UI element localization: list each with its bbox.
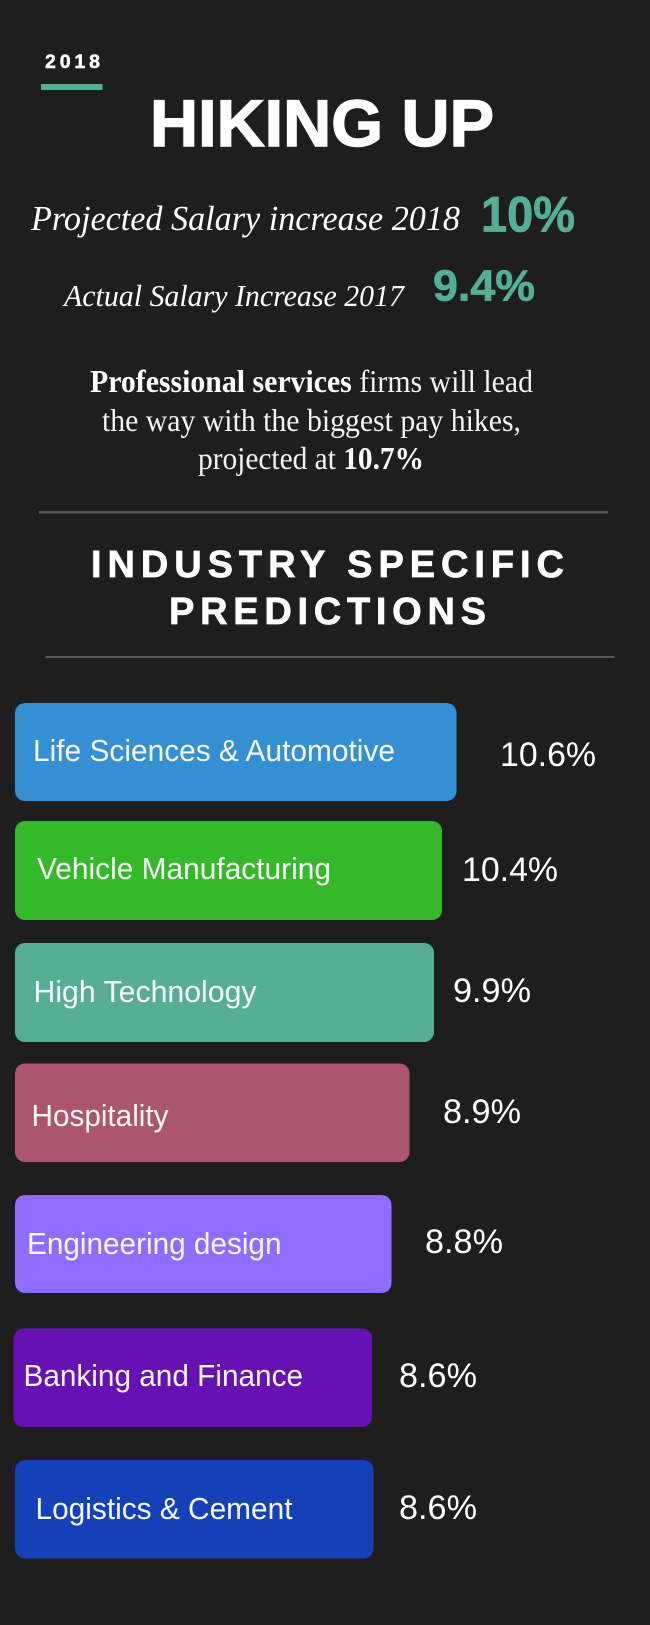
bar: Banking and Finance: 8.6% — [399, 1357, 477, 1395]
section heading: PREDICTIONS — [169, 591, 486, 633]
bar: Logistics & Cement — [15, 1460, 477, 1558]
bar: Life Sciences & Automotive: 10.6% — [500, 736, 596, 774]
professional services text block: the way with the biggest pay hikes, — [102, 403, 521, 438]
bar: High Technology: 9.9% — [453, 972, 531, 1010]
projected salary value: 10% — [481, 186, 575, 242]
year underline — [41, 84, 102, 90]
bar: High Technology: High Technology — [34, 974, 257, 1009]
bar: Vehicle Manufacturing — [15, 821, 558, 920]
bar: Engineering design: 8.8% — [425, 1223, 503, 1261]
bar: Life Sciences & Automotive: Life Sciences & Automotive — [33, 733, 395, 768]
bar: Hospitality: Hospitality — [32, 1098, 169, 1133]
projected salary label: Projected Salary increase 2018 — [30, 200, 460, 238]
professional services text block: Professional services firms will lead — [90, 364, 533, 399]
section heading — [91, 544, 564, 633]
projected salary row — [30, 186, 575, 242]
bar: Logistics & Cement: 8.6% — [399, 1489, 477, 1527]
actual salary label: Actual Salary Increase 2017 — [62, 279, 406, 313]
year label: 2018 — [45, 51, 100, 73]
bar chart — [14, 703, 596, 1558]
bar: Hospitality: 8.9% — [443, 1093, 521, 1131]
professional services text block: projected at 10.7% — [198, 441, 424, 476]
actual salary value: 9.4% — [433, 262, 535, 310]
bar: Life Sciences & Automotive — [15, 703, 596, 801]
bar: Hospitality — [15, 1064, 521, 1162]
bar: Vehicle Manufacturing: 10.4% — [462, 851, 558, 889]
bar: Banking and Finance — [14, 1328, 477, 1427]
bar: Engineering design — [15, 1195, 503, 1293]
bar: Logistics & Cement: Logistics & Cement — [36, 1491, 293, 1526]
bar: Engineering design: Engineering design — [27, 1226, 282, 1261]
title: HIKING UP — [150, 86, 494, 160]
actual salary row — [62, 262, 535, 313]
bar: Vehicle Manufacturing: Vehicle Manufacturing — [37, 851, 331, 886]
professional services text block — [90, 364, 533, 476]
section heading: INDUSTRY SPECIFIC — [91, 544, 564, 586]
bar: High Technology — [15, 943, 531, 1042]
bar: Banking and Finance: Banking and Finance — [24, 1358, 303, 1393]
